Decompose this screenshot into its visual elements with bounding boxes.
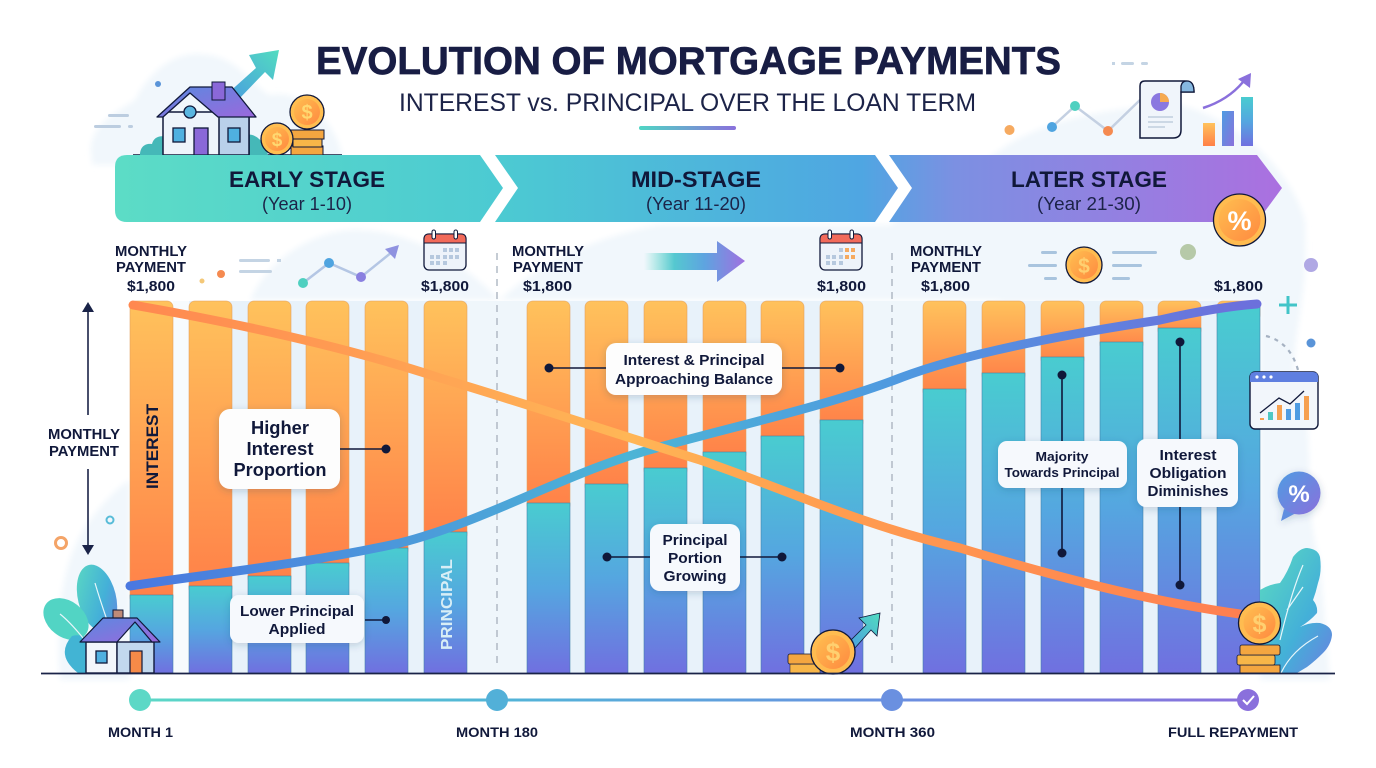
- bar chart: mid stage: [527, 301, 863, 673]
- callout: higher interest proportion: Higher: [251, 418, 309, 438]
- callout: majority towards principal: Towards Principal: [1004, 465, 1120, 480]
- timeline marker: month 180: MONTH 180: [456, 724, 538, 740]
- banner: early stage: EARLY STAGE: [229, 167, 385, 192]
- bar: early 1: [130, 301, 173, 673]
- subtitle: INTEREST vs. PRINCIPAL OVER THE LOAN TERM: [399, 89, 976, 117]
- stage banners: [115, 155, 1282, 222]
- plot backdrop: [173, 301, 1260, 673]
- timeline: [108, 689, 1298, 740]
- timeline marker: month 180: [456, 689, 538, 740]
- callout: principal portion growing: Principal: [662, 532, 728, 549]
- icon: leaves left: [35, 560, 124, 673]
- monthly payment label: later: [910, 244, 982, 295]
- bar: mid 6: [820, 301, 863, 673]
- bar: later 5: [1158, 301, 1201, 673]
- title: EVOLUTION OF MORTGAGE PAYMENTS: [316, 40, 1061, 83]
- icon: percent chat bubble: %: [1288, 481, 1310, 508]
- monthly payment label: early: [115, 244, 187, 295]
- decorative dots and plus: [56, 244, 1318, 548]
- callout: interest and principal approaching balance: Approaching Balance: [615, 371, 773, 388]
- bar: early 3: [248, 301, 291, 673]
- callout: interest obligation diminishes: Obligation: [1150, 466, 1226, 482]
- callout: higher interest proportion: Proportion: [234, 460, 326, 480]
- end amounts: $1,800: [1214, 279, 1263, 295]
- icon: coin with arrow: [788, 613, 880, 674]
- bar: later 3: [1041, 301, 1084, 673]
- end amounts: $1,800: [817, 279, 866, 295]
- icon: later stage coin with motion lines: [1028, 247, 1157, 283]
- bar: early 2: [189, 301, 232, 673]
- bar: mid 5: [761, 301, 804, 673]
- principal curve: [130, 304, 1257, 586]
- callout: majority towards principal: [998, 370, 1127, 558]
- y axis: monthly payment: PAYMENT: [49, 444, 119, 460]
- icon: percent chat bubble: [1278, 472, 1320, 521]
- icon: percent coin: [1214, 194, 1266, 246]
- bar: mid 2: [585, 301, 628, 673]
- banner: mid stage: MID-STAGE: [631, 167, 761, 192]
- background blobs: [58, 54, 1330, 680]
- callout: higher interest proportion: [219, 409, 390, 489]
- icon: house with coins: [133, 82, 342, 155]
- bar chart: early stage: [130, 301, 467, 673]
- callout: interest obligation diminishes: Interest: [1160, 448, 1217, 464]
- bar: early 5: [365, 301, 408, 673]
- bar: mid 3: [644, 301, 687, 673]
- banner: later stage: [889, 155, 1282, 222]
- icon: coins at end of curve: $: [1253, 610, 1267, 638]
- timeline marker: month 360: [850, 689, 935, 740]
- icon: window with chart: [1250, 372, 1318, 429]
- interest curve: [133, 305, 1240, 614]
- callout: lower principal applied: Lower Principal: [240, 604, 354, 620]
- bar: early 6: [424, 301, 467, 673]
- callout: higher interest proportion: Interest: [246, 439, 314, 459]
- bar chart: later stage: [923, 301, 1260, 673]
- callout: lower principal applied: Applied: [268, 622, 326, 638]
- bar: early 4: [306, 301, 349, 673]
- callout: lower principal applied: [230, 595, 390, 643]
- icon: calendar early: [424, 230, 466, 270]
- bar: later 2: [982, 301, 1025, 673]
- monthly payment label: later: $1,800: [921, 279, 970, 295]
- icon: report and chart top right: [1004, 62, 1253, 146]
- callout: interest and principal approaching balance: [544, 343, 844, 395]
- stage separators: [467, 253, 923, 673]
- callout: majority towards principal: Majority: [1036, 449, 1089, 464]
- principal label: PRINCIPAL: [439, 559, 456, 650]
- icon: small house bottom left: [80, 610, 160, 673]
- timeline marker: month 1: [108, 689, 173, 740]
- icon: house with coins: $: [272, 130, 283, 151]
- icon: mid stage arrow: [644, 241, 745, 282]
- baseline axis: [41, 672, 1335, 674]
- icon: calendar mid: [820, 230, 862, 270]
- end amounts: $1,800: [421, 279, 469, 295]
- y axis: monthly payment: MONTHLY: [48, 427, 120, 443]
- bar: mid 4: [703, 301, 746, 673]
- banner: early stage: [115, 155, 503, 222]
- callout: principal portion growing: Growing: [664, 568, 726, 585]
- interest label: INTEREST: [143, 403, 162, 489]
- callout: principal portion growing: Portion: [668, 550, 722, 567]
- banner: mid stage: (Year 11-20): [646, 194, 746, 214]
- y axis: monthly payment: [48, 302, 120, 555]
- timeline marker: month 1: MONTH 1: [108, 724, 173, 740]
- monthly payment label: mid: MONTHLY: [512, 244, 584, 260]
- timeline marker: full repayment: [1168, 689, 1298, 740]
- callout: interest and principal approaching balance: Interest & Principal: [624, 352, 764, 369]
- icon: growth arrow behind house: [226, 50, 279, 100]
- monthly payment label: early: MONTHLY: [115, 244, 187, 260]
- title underline: [639, 126, 736, 130]
- monthly payment label: later: MONTHLY: [910, 244, 982, 260]
- timeline marker: full repayment: FULL REPAYMENT: [1168, 724, 1298, 740]
- icon: later stage coin with motion lines: $: [1078, 255, 1090, 278]
- bar: mid 1: [527, 301, 570, 673]
- icon: early stage mini line chart: [200, 245, 399, 288]
- icon: leaves right: [1260, 548, 1332, 673]
- callout: interest obligation diminishes: [1137, 338, 1238, 590]
- callout: interest obligation diminishes: Diminishes: [1148, 484, 1228, 500]
- icon: percent coin: %: [1227, 206, 1252, 236]
- monthly payment label: mid: $1,800: [523, 279, 572, 295]
- monthly payment label: later: PAYMENT: [911, 260, 981, 276]
- icon: coin with arrow: $: [826, 637, 841, 667]
- end amounts: [421, 279, 1263, 295]
- banner: mid stage: [495, 155, 898, 222]
- monthly payment label: mid: PAYMENT: [513, 260, 583, 276]
- banner: early stage: (Year 1-10): [262, 194, 352, 214]
- icon: coins at end of curve: [1237, 602, 1280, 673]
- decorative dashes top left: [94, 81, 161, 128]
- monthly payment label: early: $1,800: [127, 279, 175, 295]
- icon: house with coins: $: [301, 102, 313, 124]
- monthly payment label: early: PAYMENT: [116, 260, 186, 276]
- callout: principal portion growing: [602, 524, 786, 591]
- bar: later 6: [1217, 301, 1260, 673]
- banner: later stage: LATER STAGE: [1011, 167, 1167, 192]
- timeline marker: month 360: MONTH 360: [850, 724, 935, 740]
- monthly payment label: mid: [512, 244, 584, 295]
- bar: later 4: [1100, 301, 1143, 673]
- bar: later 1: [923, 301, 966, 673]
- banner: later stage: (Year 21-30): [1037, 194, 1141, 214]
